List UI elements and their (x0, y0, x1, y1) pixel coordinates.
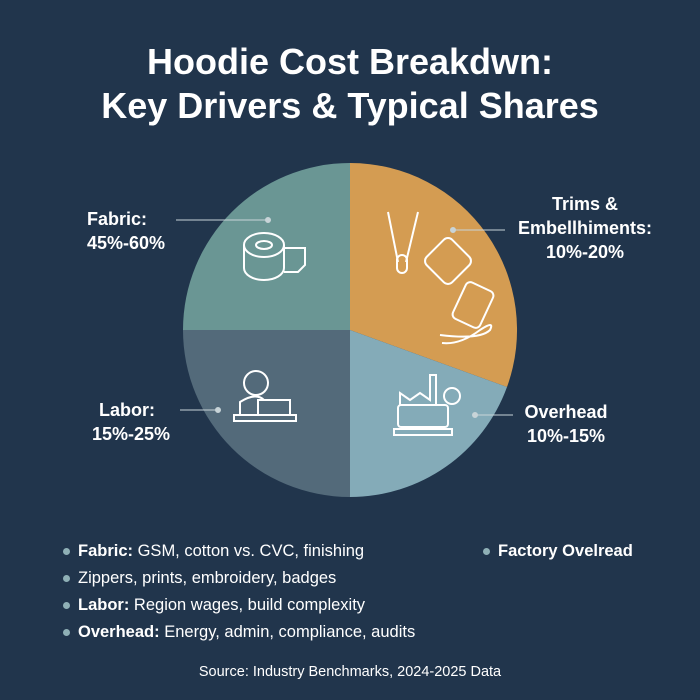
label: fabric: Fabric: (87, 209, 147, 229)
label: labor (92, 400, 170, 444)
title (101, 41, 599, 126)
slice: fabric (183, 163, 350, 330)
bullet list: Fabric: GSM, cotton vs. CVC, finishing (78, 542, 364, 560)
slice: overhead (350, 330, 507, 497)
label: trims: Embellhiments: (518, 218, 652, 238)
icon: labor (234, 371, 296, 421)
icon: overhead factory (394, 375, 460, 435)
label: overhead: 10%-15% (527, 426, 605, 446)
label: trims: Trims & (552, 194, 618, 214)
label: trims (518, 194, 652, 262)
bullet list: Labor: Region wages, build complexity (78, 596, 365, 614)
slice: labor (183, 330, 350, 497)
icon: fabric roll (244, 233, 305, 280)
label: overhead (524, 402, 608, 446)
bullet list (63, 542, 633, 641)
bullet list: Factory Ovelread (498, 542, 633, 560)
title: Key Drivers & Typical Shares (101, 85, 599, 126)
bullet list: Overhead: Energy, admin, compliance, audits (78, 623, 415, 641)
bullet list: Zippers, prints, embroidery, badges (78, 569, 336, 587)
leader lines (176, 218, 513, 418)
label: fabric: 45%-60% (87, 233, 165, 253)
label: overhead: Overhead (524, 402, 608, 422)
label: labor: 15%-25% (92, 424, 170, 444)
icon: trims (388, 212, 495, 343)
slice: trims (350, 163, 517, 387)
label: fabric (87, 209, 165, 253)
label: labor: Labor: (99, 400, 155, 420)
title: Hoodie Cost Breakdwn: (147, 41, 553, 82)
source: Source: Industry Benchmarks, 2024-2025 Data (199, 664, 501, 680)
label: trims: 10%-20% (546, 242, 624, 262)
